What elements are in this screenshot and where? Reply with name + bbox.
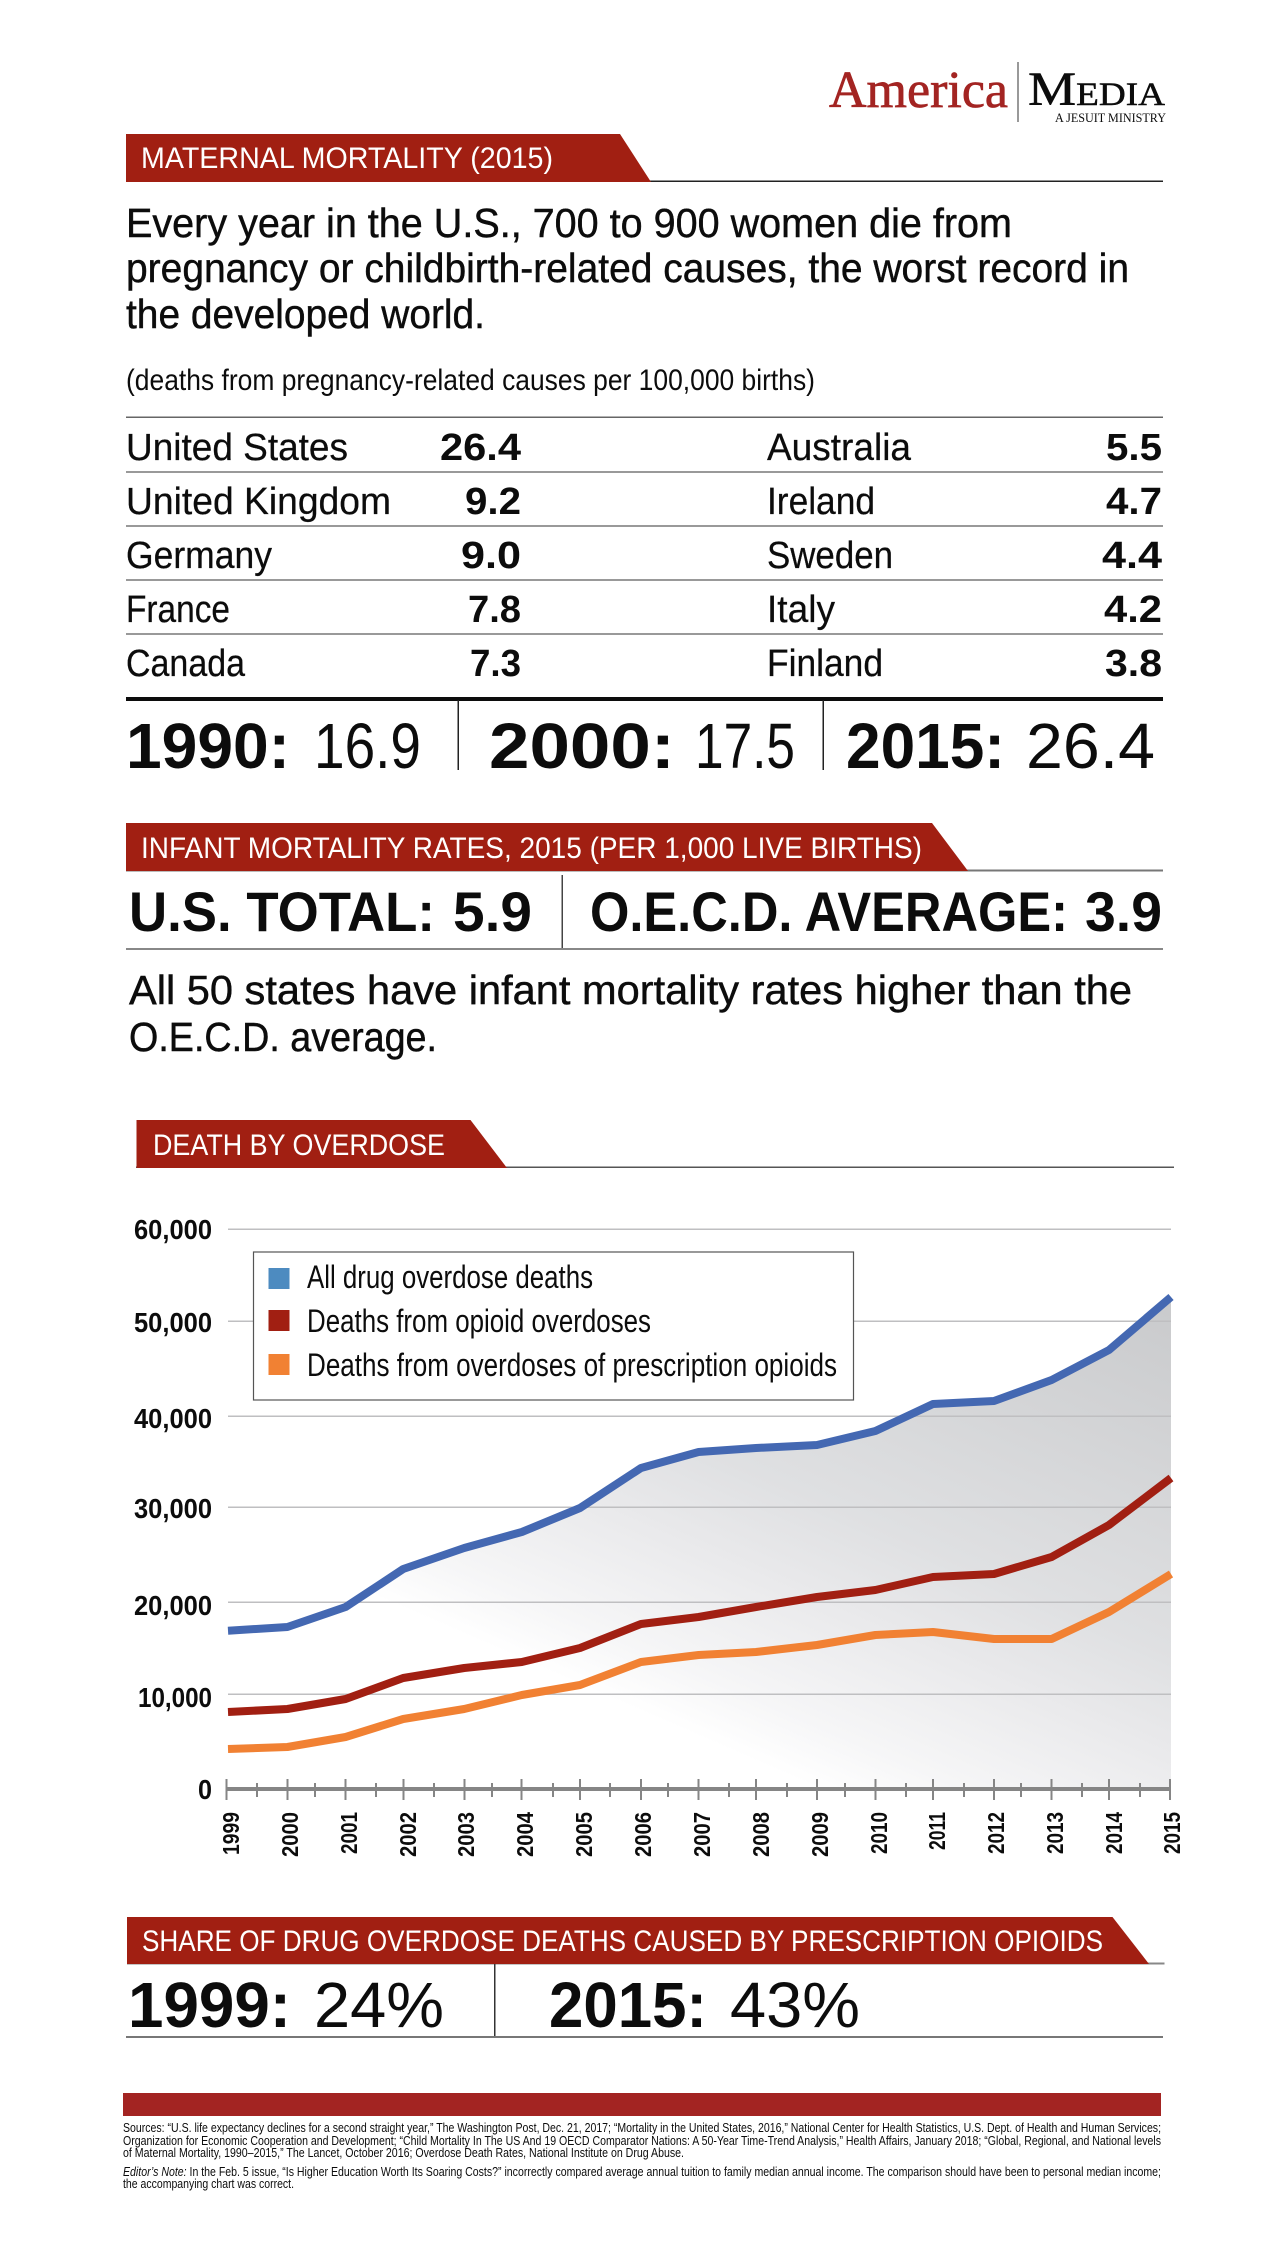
section heading: infant mortality xyxy=(126,823,1163,872)
x axis year labels xyxy=(218,1812,1185,1857)
area shading under all drug overdose deaths xyxy=(228,1297,1171,1789)
x axis year labels: 2014 xyxy=(1101,1812,1127,1854)
y axis labels: 40,000 xyxy=(134,1403,212,1434)
row: Ireland xyxy=(767,481,1162,523)
x axis year labels: 2005 xyxy=(571,1812,597,1857)
y axis labels: 10,000 xyxy=(138,1682,212,1713)
stat: 1990: 16.9 xyxy=(314,710,421,782)
section heading: maternal mortality: MATERNAL MORTALITY (2015) xyxy=(141,142,553,175)
x axis year labels: 2009 xyxy=(807,1812,833,1857)
stat: O.E.C.D. average: 3.9 xyxy=(1085,880,1162,943)
row: France: France xyxy=(126,589,230,631)
row: Finland: Finland xyxy=(767,643,883,685)
stat: 2015 share xyxy=(549,1969,860,2041)
infant mortality statement xyxy=(129,967,1132,1060)
logo: America Media: MEDIA xyxy=(1028,63,1165,116)
row: United Kingdom: United Kingdom xyxy=(126,481,391,523)
stat: 2000: 2000: xyxy=(489,710,675,782)
x axis year labels: 2001 xyxy=(336,1812,362,1854)
x axis year labels: 1999 xyxy=(218,1812,244,1855)
section heading: infant mortality: INFANT MORTALITY RATES, 2015 (PER 1,000 LIVE BIRTHS) xyxy=(141,832,922,865)
prescription opioid share stats xyxy=(126,1964,1163,2041)
logo: America Media xyxy=(829,62,1166,125)
y axis labels: 30,000 xyxy=(134,1493,212,1524)
x axis year labels: 2000 xyxy=(277,1812,303,1857)
row: United Kingdom: 9.2 xyxy=(465,481,521,523)
x axis year labels: 2015 xyxy=(1159,1812,1185,1854)
row: Finland xyxy=(767,643,1162,685)
line: all drug overdose deaths xyxy=(228,1297,1171,1631)
row: Australia xyxy=(767,427,1162,469)
row: France: 7.8 xyxy=(468,589,521,631)
intro statement: Every year in the U.S., 700 to 900 women die from xyxy=(126,200,1012,246)
line chart: overdose deaths 1999-2015 xyxy=(134,1214,1185,1857)
y axis gridlines xyxy=(228,1228,1171,1695)
row: Sweden: Sweden xyxy=(767,535,893,577)
row: Canada xyxy=(126,643,521,685)
stat: 1990 xyxy=(126,710,421,782)
x axis year labels: 2010 xyxy=(866,1812,892,1854)
row: Germany xyxy=(126,535,521,577)
row: United States: United States xyxy=(126,427,348,469)
x axis year labels: 2012 xyxy=(983,1812,1009,1854)
intro statement: pregnancy or childbirth-related causes, the worst record in xyxy=(126,245,1129,291)
y axis labels: 50,000 xyxy=(134,1307,212,1338)
section heading: death by overdose: DEATH BY OVERDOSE xyxy=(153,1129,445,1162)
row: Ireland: Ireland xyxy=(767,481,875,523)
row: United States: 26.4 xyxy=(440,427,521,469)
row: Australia: 5.5 xyxy=(1106,427,1162,469)
x axis year labels: 2008 xyxy=(748,1812,774,1857)
row: United States xyxy=(126,427,521,469)
y axis labels xyxy=(134,1214,212,1805)
row: Australia: Australia xyxy=(767,427,912,469)
stat: 1999 share: 24% xyxy=(314,1969,444,2041)
intro statement xyxy=(126,200,1129,337)
stat: 2015 xyxy=(846,710,1155,782)
x axis year labels: 2011 xyxy=(924,1812,950,1850)
footer red bar xyxy=(123,2093,1161,2116)
row: Canada: Canada xyxy=(126,643,246,685)
sources: of Maternal Mortality, 1990–2015,” The Lancet, October 2016; Overdose Death Rates, National Institute on Drug Abuse. xyxy=(123,2146,684,2160)
row: Italy: 4.2 xyxy=(1104,589,1162,631)
stat: 2015: 26.4 xyxy=(1026,710,1155,782)
table subtitle: (deaths from pregnancy-related causes per 100,000 births) xyxy=(126,364,815,397)
y axis labels: 20,000 xyxy=(134,1590,212,1621)
editor's note: the accompanying chart was correct. xyxy=(123,2177,294,2191)
stat: U.S. total: 5.9 xyxy=(453,880,532,943)
x axis year labels: 2013 xyxy=(1042,1812,1068,1854)
stat: U.S. total: U.S. TOTAL: xyxy=(129,880,435,943)
logo: America Media: A JESUIT MINISTRY xyxy=(1055,111,1166,125)
row: Ireland: 4.7 xyxy=(1106,481,1162,523)
legend item: all drug overdose deaths: All drug overdose deaths xyxy=(307,1259,593,1295)
stat: 1999 share: 1999: xyxy=(128,1969,291,2041)
legend item: opioid overdoses: Deaths from opioid overdoses xyxy=(307,1303,651,1339)
row: Canada: 7.3 xyxy=(470,643,521,685)
x axis year labels: 2007 xyxy=(689,1812,715,1857)
x axis year labels: 2002 xyxy=(395,1812,421,1857)
maternal mortality table xyxy=(126,416,1163,685)
section heading: death by overdose xyxy=(136,1120,1174,1168)
stat: 1990: 1990: xyxy=(126,710,290,782)
stat: 2000 xyxy=(489,710,795,782)
y axis labels: 0 xyxy=(198,1774,212,1805)
row: Germany: 9.0 xyxy=(461,535,521,577)
sources xyxy=(123,2121,1161,2160)
stat: O.E.C.D. average: O.E.C.D. AVERAGE: xyxy=(590,880,1068,943)
row: Italy: Italy xyxy=(767,589,835,631)
x axis year labels: 2006 xyxy=(630,1812,656,1857)
row: Sweden: 4.4 xyxy=(1102,535,1162,577)
line: deaths from opioid overdoses xyxy=(228,1478,1171,1712)
editor's note xyxy=(123,2165,1161,2191)
row: Sweden xyxy=(767,535,1162,577)
x axis year labels: 2004 xyxy=(512,1812,538,1857)
infant mortality stats xyxy=(126,875,1163,950)
row: United Kingdom xyxy=(126,481,521,523)
maternal mortality trend stats xyxy=(126,697,1163,782)
section heading: share of overdose deaths: SHARE OF DRUG OVERDOSE DEATHS CAUSED BY PRESCRIPTION OPIOIDS xyxy=(142,1925,1103,1958)
stat: 2015 share: 43% xyxy=(730,1969,860,2041)
infant mortality statement: O.E.C.D. average. xyxy=(129,1014,437,1060)
intro statement: the developed world. xyxy=(126,291,485,337)
row: Italy xyxy=(767,589,1162,631)
row: France xyxy=(126,589,521,631)
stat: 2000: 17.5 xyxy=(695,710,795,782)
x axis year labels: 2003 xyxy=(453,1812,479,1857)
section heading: share of overdose deaths xyxy=(127,1917,1164,1964)
infant mortality statement: All 50 states have infant mortality rates higher than the xyxy=(129,967,1132,1013)
chart legend xyxy=(254,1252,854,1400)
logo: America Media: America xyxy=(829,62,1008,119)
stat: 2015 share: 2015: xyxy=(549,1969,707,2041)
stat: 2015: 2015: xyxy=(846,710,1005,782)
legend item: prescription opioids: Deaths from overdoses of prescription opioids xyxy=(307,1347,837,1383)
x axis with tick marks xyxy=(226,1779,1171,1800)
line: deaths from prescription opioid overdoses xyxy=(228,1574,1171,1749)
y axis labels: 60,000 xyxy=(134,1214,212,1245)
row: Germany: Germany xyxy=(126,535,272,577)
stat: 1999 share xyxy=(128,1969,444,2041)
section heading: maternal mortality xyxy=(126,134,1163,182)
row: Finland: 3.8 xyxy=(1105,643,1162,685)
